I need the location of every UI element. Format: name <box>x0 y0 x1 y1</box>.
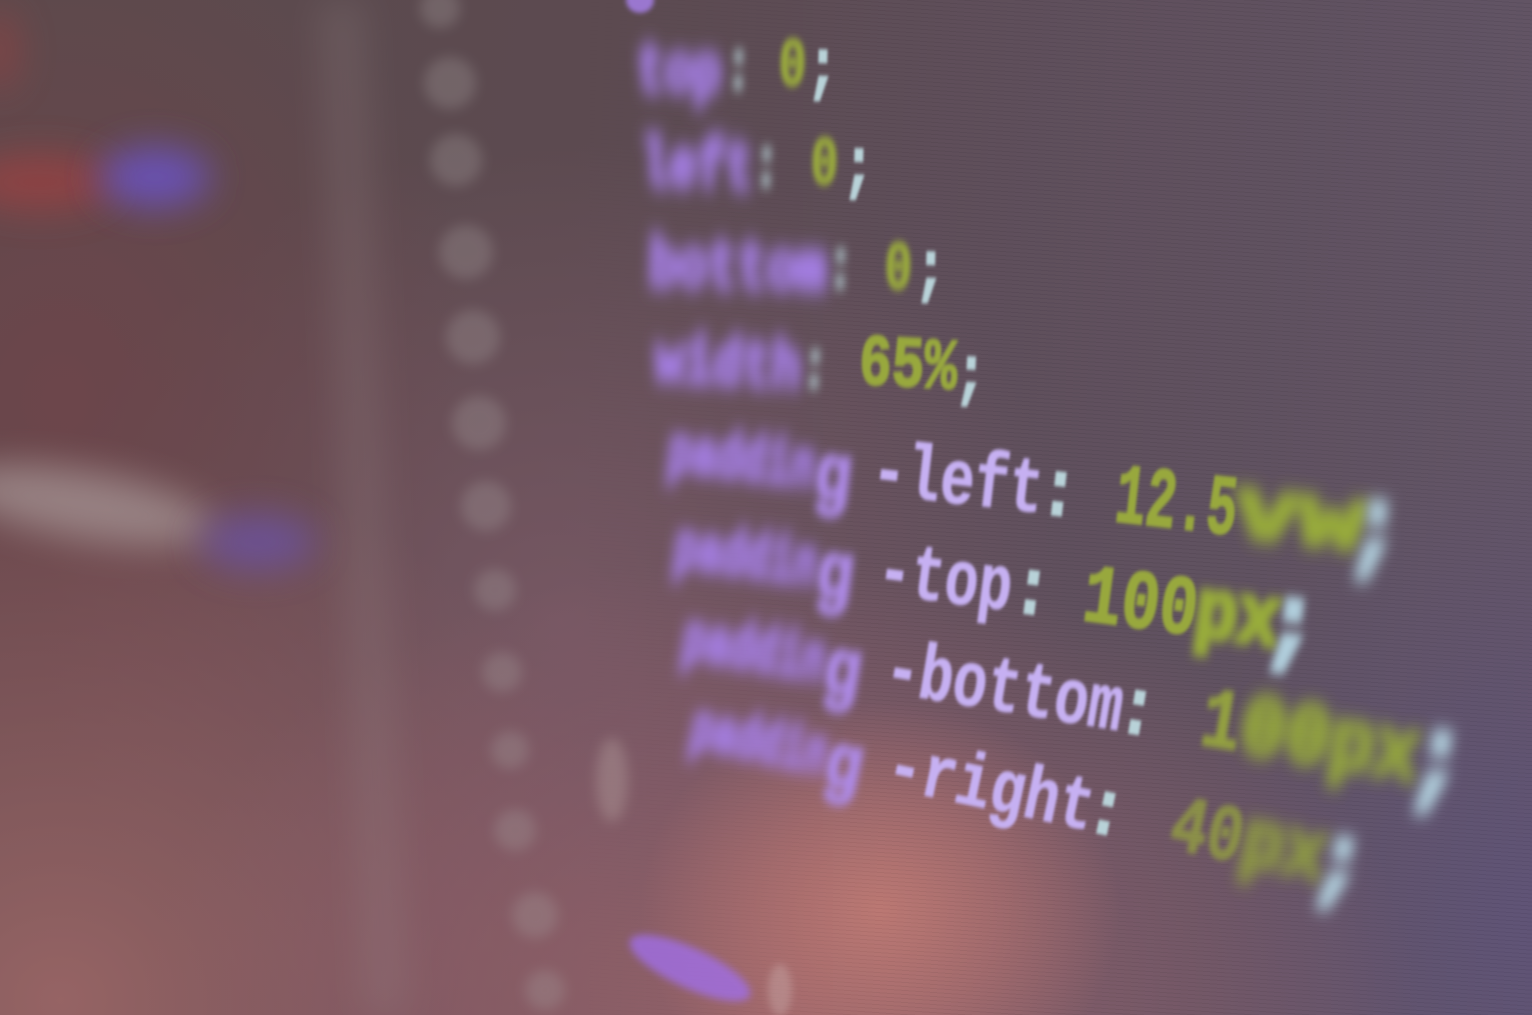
line: padding-left: 12.5vw;: 12.5 <box>1110 450 1242 560</box>
line: padding-bottom: 100px;: -bottom <box>878 627 1130 754</box>
line: padding-left: 12.5vw; <box>662 395 1405 592</box>
line: bottom: 0;: bottom <box>647 227 827 311</box>
line: padding-top: 100px; <box>667 494 1319 685</box>
line: padding-top: 100px;: ; <box>1262 573 1319 684</box>
line: width: 65%;: 65% <box>857 323 960 411</box>
line: padding-top: 100px;: paddin <box>669 514 822 605</box>
line: bottom: 0;: : <box>825 229 855 309</box>
line: bottom: 0;: 0 <box>883 231 913 310</box>
line: padding-left: 12.5vw;: ; <box>1345 473 1405 592</box>
line: padding-left: 12.5vw;: -left <box>867 429 1048 536</box>
line: width: 65%; <box>653 312 987 418</box>
line: padding-top: 100px;: g <box>810 528 859 624</box>
line: padding-right: 40px;: ; <box>1306 811 1372 923</box>
line: bottom: 0; <box>647 224 945 314</box>
line: padding-bottom: 100px;: 00px <box>1233 679 1427 805</box>
line: left: 0;: left <box>639 127 754 209</box>
line: padding-right: 40px;: -right <box>879 726 1102 853</box>
line: left: 0;: ; <box>843 128 873 208</box>
line: padding-right: 40px;: : <box>1079 769 1132 859</box>
line: padding-bottom: 100px;: : <box>1112 666 1162 759</box>
line: padding-left: 12.5vw;: paddin <box>664 418 819 507</box>
line: padding-right: 40px; <box>680 678 1372 923</box>
line: padding-left: 12.5vw;: : <box>1036 448 1082 540</box>
line: top: 0;: ; <box>808 29 837 109</box>
line: top: 0;: : <box>724 30 753 110</box>
line: padding-left: 12.5vw;: g <box>809 430 856 526</box>
line: padding-top: 100px;: : <box>1008 546 1055 639</box>
line: padding-bottom: 100px;: ; <box>1403 699 1472 827</box>
line: padding-left: 12.5vw;: vw <box>1229 463 1370 575</box>
line: top: 0;: top <box>635 32 722 113</box>
line: width: 65%;: ; <box>955 338 986 415</box>
blurred fragments at the bottom of the screen <box>596 738 792 1015</box>
line: padding-right: 40px;: g <box>816 722 870 815</box>
vertical editor gutter line <box>318 0 408 1015</box>
line: top: 0; <box>635 23 837 116</box>
line: padding-bottom: 100px;: 1 <box>1194 673 1249 776</box>
blurred left-side code highlights <box>0 8 316 570</box>
line: padding-top: 100px;: 100 <box>1077 552 1203 660</box>
line: bottom: 0;: ; <box>915 231 945 311</box>
line: padding-right: 40px;: 40 <box>1162 782 1251 886</box>
line: padding-top: 100px;: -top <box>872 528 1018 634</box>
line: padding-right: 40px;: paddin <box>684 694 834 792</box>
line: left: 0; <box>639 121 873 212</box>
line: width: 65%;: width <box>653 325 803 409</box>
line: left: 0;: : <box>751 127 781 207</box>
blurred line-number dots <box>420 0 565 1010</box>
line: padding-right: 40px;: px <box>1233 797 1335 903</box>
line: padding-bottom: 100px; <box>673 577 1472 827</box>
line: padding-top: 100px;: px <box>1189 567 1286 671</box>
line: left: 0;: 0 <box>810 126 839 205</box>
line: width: 65%;: : <box>799 332 830 409</box>
line: top: 0;: 0 <box>778 27 807 107</box>
line: padding-bottom: 100px;: paddin <box>677 605 831 701</box>
purple fragment at top edge <box>626 0 654 13</box>
line: padding-bottom: 100px;: g <box>816 625 868 721</box>
